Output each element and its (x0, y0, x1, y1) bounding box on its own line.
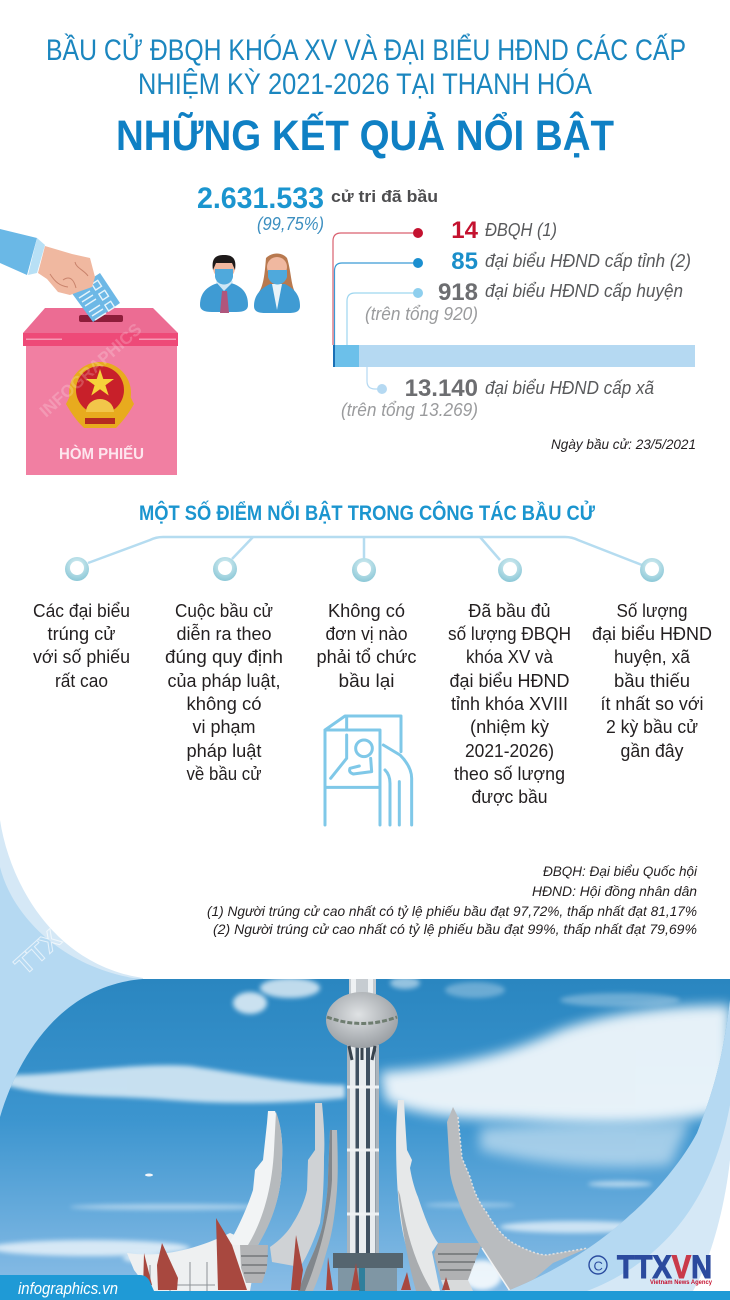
title: NHỮNG KẾT QUẢ NỔI BẬT (116, 110, 614, 160)
illustration: hand and ballot box (0, 229, 178, 475)
stat: HĐND cấp huyện (365, 279, 683, 324)
bullet nodes (65, 557, 664, 582)
stat: HĐND cấp xã: 13.140 (405, 375, 478, 402)
point 4: tỉnh khóa XVIII (451, 693, 568, 714)
point 3: bầu lại (338, 670, 394, 691)
point 2: pháp luật (186, 740, 262, 761)
point 2: không có (186, 693, 262, 714)
point 4: (nhiệm kỳ (470, 716, 550, 737)
voters total: (99,75%) (257, 214, 324, 234)
base blocks (333, 1253, 403, 1291)
point 5 (592, 600, 712, 761)
footnotes: ĐBQH: Đại biểu Quốc hội (543, 863, 698, 879)
point 5: Số lượng (616, 600, 688, 621)
box label: HÒM PHIẾU (59, 444, 144, 463)
sail D block (434, 1243, 482, 1291)
woman (254, 254, 300, 313)
point 3: đơn vị nào (326, 623, 408, 644)
photo: Thanh Hoa monument against sky (0, 977, 730, 1291)
small bird (145, 1174, 153, 1176)
stat: HĐND cấp xã: đại biểu HĐND cấp xã (485, 378, 654, 398)
white scaffold at left (127, 1233, 258, 1291)
icon: masked voters (200, 254, 300, 313)
sleeve (0, 229, 37, 275)
left block (240, 1245, 268, 1283)
point 1: trúng cử (48, 623, 116, 644)
point 1: Các đại biểu (33, 600, 130, 621)
title: NHIỆM KỲ 2021-2026 TẠI THANH HÓA (138, 68, 592, 101)
bar (333, 345, 695, 367)
stat: HĐND cấp xã: (trên tổng 13.269) (341, 400, 478, 420)
point 2: đúng quy định (165, 646, 283, 667)
point 2 (165, 600, 283, 784)
point 2: vi phạm (192, 716, 256, 737)
tower shaft (347, 979, 379, 1257)
background: curved bands (0, 820, 730, 1291)
footer bar (0, 1275, 730, 1300)
point 2: về bầu cử (186, 763, 262, 784)
point 4: số lượng ĐBQH (448, 623, 571, 644)
point 3 (316, 600, 416, 691)
tower ball (326, 992, 398, 1060)
sail B (270, 1103, 324, 1267)
stat: HĐND cấp xã (341, 375, 654, 420)
point 5: đại biểu HĐND (592, 623, 712, 644)
point 5: gần đây (620, 740, 684, 761)
point 4: Đã bầu đủ (468, 600, 550, 621)
cuff (28, 238, 45, 275)
footnotes: (1) Người trúng cử cao nhất có tỷ lệ phiếu bầu đạt 97,72%, thấp nhất đạt 81,17% (207, 903, 697, 919)
watermark on box: INFOGRAPHICS (36, 320, 146, 421)
point 4: đại biểu HĐND (450, 670, 570, 691)
point 1 (33, 600, 130, 691)
connector: HĐND xã (367, 367, 387, 394)
election date: Ngày bầu cử: 23/5/2021 (551, 436, 696, 452)
ballot box body (26, 345, 177, 475)
chart: elected deputies (333, 217, 696, 452)
stat: ĐBQH: ĐBQH (1) (485, 220, 557, 240)
sail D (396, 1100, 440, 1291)
point 5: ít nhất so với (600, 693, 704, 714)
point 2: diễn ra theo (176, 623, 272, 644)
point 5: bầu thiếu (614, 670, 690, 691)
footnotes: (2) Người trúng cử cao nhất có tỷ lệ phiếu bầu đạt 99%, thấp nhất đạt 79,69% (213, 921, 697, 937)
red flags (143, 1218, 450, 1290)
point 4: 2021-2026) (465, 740, 554, 761)
point 4: được bầu (472, 786, 548, 807)
footer bar: infographics.vn (18, 1279, 118, 1298)
connector: HĐND tỉnh (334, 258, 423, 345)
logo: TTXVN: C (594, 1258, 603, 1274)
point 2: Cuộc bầu cử (175, 600, 273, 621)
stat: HĐND cấp tỉnh: đại biểu HĐND cấp tỉnh (2) (485, 251, 691, 271)
logo: TTXVN: Vietnam News Agency (650, 1280, 713, 1286)
ballot box lid (23, 308, 178, 346)
point 4: theo số lượng (454, 763, 565, 784)
point 1: với số phiếu (33, 646, 130, 667)
voters total: cử tri đã bầu (331, 187, 438, 206)
point 3: phải tổ chức (316, 646, 416, 667)
connector: ĐBQH (333, 228, 423, 345)
stat: HĐND cấp tỉnh (451, 248, 691, 275)
title (46, 33, 686, 160)
point 4 (448, 600, 571, 807)
stat: HĐND cấp tỉnh: 85 (451, 248, 478, 275)
sail C (298, 1130, 338, 1291)
man (200, 255, 248, 313)
clouds (0, 977, 730, 1290)
sail E (447, 1107, 588, 1291)
footnotes: HĐND: Hội đồng nhân dân (532, 883, 697, 899)
logo: TTXVN: TTXVN (617, 1249, 712, 1285)
watermark: TTX: TTX (9, 924, 67, 980)
point 5: 2 kỳ bầu cử (606, 716, 698, 737)
ballot paper (71, 273, 120, 322)
stat: ĐBQH (451, 217, 557, 244)
voters total (197, 182, 438, 234)
point 3: Không có (328, 600, 405, 621)
point 4: khóa XV và (466, 646, 554, 667)
point 2: của pháp luật, (168, 670, 280, 691)
voters total: 2.631.533 (197, 182, 324, 215)
stat: HĐND cấp huyện: 918 (438, 279, 478, 306)
section heading: MỘT SỐ ĐIỂM NỔI BẬT TRONG CÔNG TÁC BẦU CỬ (139, 501, 595, 525)
national emblem (66, 362, 134, 428)
icon: voting booth (325, 716, 412, 825)
connector: HĐND huyện (347, 288, 423, 345)
point 5: huyện, xã (614, 646, 691, 667)
connector tree (88, 537, 642, 565)
sail A (228, 1111, 282, 1245)
point 1: rất cao (55, 670, 108, 691)
stat: HĐND cấp huyện: (trên tổng 920) (365, 304, 478, 324)
stat: ĐBQH: 14 (451, 217, 479, 244)
stat: HĐND cấp huyện: đại biểu HĐND cấp huyện (485, 281, 683, 301)
footnotes (207, 863, 698, 937)
hand (38, 246, 95, 295)
